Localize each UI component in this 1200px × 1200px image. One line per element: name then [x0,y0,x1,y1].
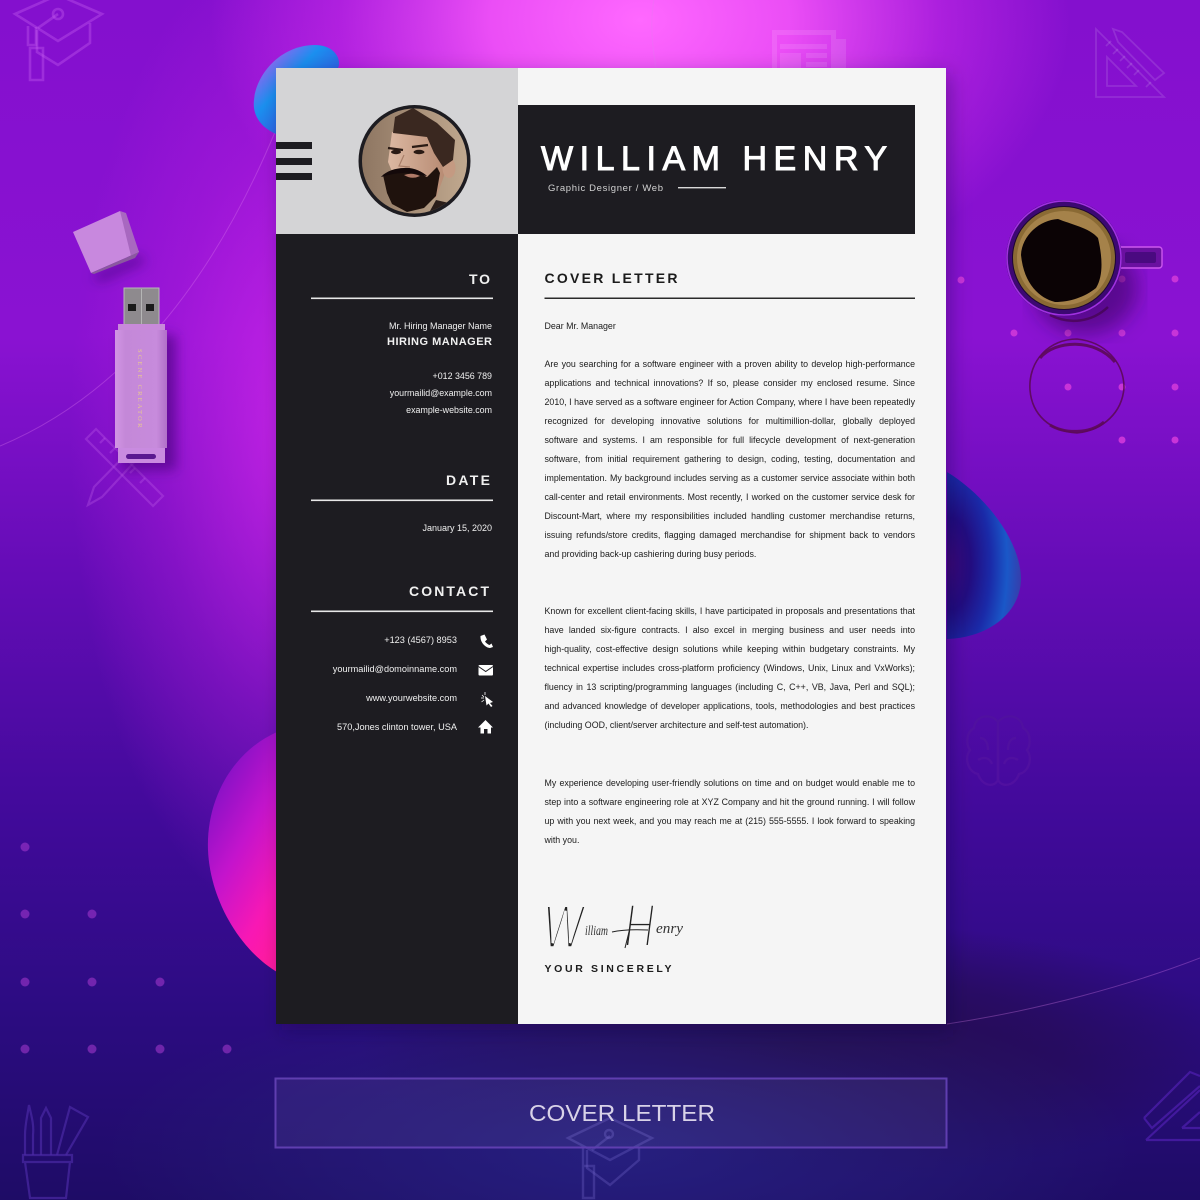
section: contact: yourmailid@domoinname.com [333,664,457,674]
name: WILLIAM HENRY [541,140,887,178]
paragraph 2: high-quality, cost-effective design solutions while keeping within budgetary constraints. My [544,644,915,654]
panel: letter page shadow [282,74,950,1030]
signature: H [624,892,655,961]
icon: house [478,720,493,734]
blob: top left [254,45,339,134]
icon: graduation cap top left [15,0,102,80]
panel: dark sidebar [276,234,518,1024]
paragraph 3: step into a software engineering role at XYZ Company and hit the ground running. I will follow [544,797,915,807]
section: date: DATE [446,472,490,488]
paragraph 3: with you. [544,835,579,845]
paragraph 2: have landed six-figure contracts. I also excel in merging business and user needs into [544,625,915,635]
paragraph 1: call-center and retail environments. Most recently, I worked on the customer service desk for [544,492,915,502]
icon: usb drive: SCENE CREATOR [136,349,143,429]
section: to: yourmailid@example.com [390,388,492,398]
icon: document top [772,30,846,68]
coffee stain under mug [1050,307,1108,321]
greeting: Dear Mr. Manager [544,321,616,331]
paragraph 1: Discount-Mart, where my responsibilities included handling customer merchandise returns, [544,511,915,521]
section: to: Mr. Hiring Manager Name [389,321,492,331]
icon: crossed ruler and pencil [86,429,163,506]
panel: photo header [276,68,518,234]
section: date [311,472,493,533]
job title: Graphic Designer / Web [548,183,663,194]
section: to [311,271,493,415]
icon: cursor [481,692,493,707]
section: to: HIRING MANAGER [387,336,492,348]
title banner [518,105,915,234]
heading: cover letter: COVER LETTER [544,270,678,286]
paragraph 1: and providing back-up cashiering during busy periods. [544,549,756,559]
paragraph 1: 2010, I have served as a software engineer for Action Company, where I have been repeatedly [544,397,915,407]
paragraph 3: up with you next week, and you may reach me at (215) 555-5555. I look forward to speaking [544,816,915,826]
paragraph 1 [544,359,915,559]
bottom label box: COVER LETTER [529,1100,715,1126]
icon: ruler bottom right [1144,1072,1200,1140]
signature: illiam [585,924,608,939]
paragraph 1: implementation. My background includes serving as a customer service associate within both [544,473,915,483]
dot grid: lower left [20,842,232,1054]
section: to: TO [469,271,490,287]
paragraph 1: applications and technical innovations? If so, please consider my enclosed resume. Since [544,378,915,388]
paragraph 1: Are you searching for a software engineer with a proven ability to develop high-performance [544,359,915,369]
icon: brain [967,716,1030,785]
portrait photo [358,105,470,220]
section: to: +012 3456 789 [433,371,492,381]
signature: enry [656,921,683,937]
icon: graduation cap bottom [568,1118,652,1198]
paragraph 2: technical expertise includes cross-platform proficiency (Windows, Unix, Linux and VxWorks); [544,663,915,673]
section: contact: www.yourwebsite.com [365,693,457,703]
signature: W [543,893,587,962]
blob: right [947,472,1021,639]
paragraph 2: fluency in 13 scripting/programming languages (including C, C++, VB, Java, Perl and SQL); [544,682,915,692]
paragraph 2: and advanced knowledge of developer applications, tools, methodologies and best practices [544,701,915,711]
icon: set square and pencil [1096,29,1164,97]
icon: menu bars [276,142,312,180]
icon: phone [480,634,493,648]
paragraph 3 [544,778,915,845]
icon: usb drive [115,288,176,470]
blob: bottom left [208,732,277,972]
paragraph 1: issuing refunds/store credits, flagging damaged merchandise for shipment back to vendors [544,530,915,540]
section: contact [311,583,493,732]
coffee stain ring [1030,339,1124,433]
section: contact: 570,Jones clinton tower, USA [337,722,458,732]
dot grid: upper right [958,276,1178,444]
section: date: January 15, 2020 [422,523,492,533]
icon: pencil cup [23,1105,88,1198]
paragraph 1: recognized for developing innovative solutions for multimillion-dollar, globally deployed [544,416,915,426]
icon: usb cap [73,211,146,282]
paragraph 1: software and systems. I am responsible for full lifecycle development of next-generation [544,435,915,445]
section: contact: CONTACT [409,583,489,599]
bottom label box [276,1078,946,1148]
signature [543,892,683,962]
panel: letter page [276,68,946,1024]
section: contact: +123 (4567) 8953 [384,635,457,645]
icon: envelope [478,665,493,676]
section: to: example-website.com [406,405,492,415]
paragraph 2: Known for excellent client-facing skills, I have participated in proposals and presentations that [544,606,915,616]
paragraph 3: My experience developing user-friendly solutions on time and on budget would enable me to [544,778,915,788]
icon: coffee mug [1006,200,1162,334]
paragraph 2 [544,606,915,730]
paragraph 1: software, from initial requirement gathering to design, coding, testing, documentation and [544,454,915,464]
paragraph 2: (including OOD, client/server architecture and self-test automation). [544,720,808,730]
sign-off: YOUR SINCERELY [544,963,672,975]
